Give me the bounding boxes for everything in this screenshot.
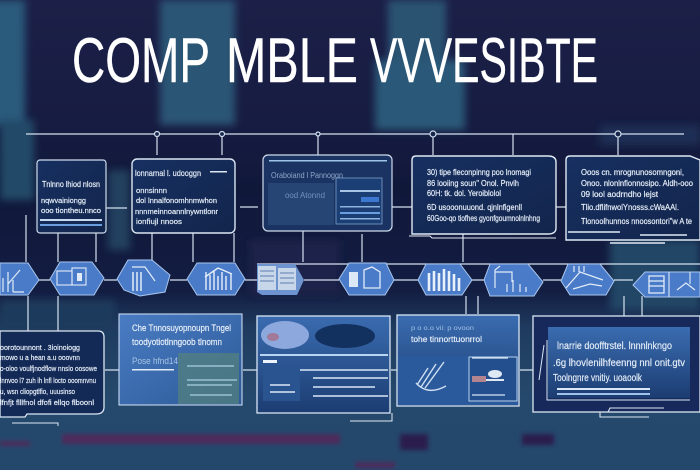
panel: bottom 4: p o o.o vii: p ovoon <box>411 325 474 332</box>
panel: top 4: 6D usooonuuond. qjnlnfigenll <box>427 203 522 212</box>
icon: plant hexagon <box>0 263 39 295</box>
connector network <box>26 134 700 370</box>
panel: bottom 1: lfnfjt flllfnol dfofi ellqo flboonl <box>0 398 94 407</box>
title: MBLE <box>226 26 358 96</box>
panel: bottom 5: lnarrie doofftrstel. lnnnlnkngo <box>557 341 672 352</box>
panel: top 2: dol lnnalfonomhnmwhon <box>136 196 217 205</box>
panel: top 3: Oraboiand l Pannoggn <box>271 170 343 180</box>
title <box>72 26 598 96</box>
panel: bottom 2: Che Tnnosuyopnoupn Tngel <box>132 323 231 333</box>
panel: top 5 <box>566 156 700 243</box>
panel: top 1 <box>37 160 106 233</box>
panel: top 2: onnsinnn <box>136 186 167 195</box>
icon row <box>0 260 700 297</box>
icon: database hexagon <box>633 272 700 297</box>
panel: bottom 1: lnnvoo l7 zuh ih lnfl locto ooomnvnu <box>0 376 96 385</box>
icon: city bars hexagon <box>418 264 472 295</box>
panel: top 5: Tlio.dflifnwolYnosss.cWaAAl. <box>581 203 679 212</box>
panel: bottom 2: toodyotiotlnngoob tlnomn <box>132 337 222 347</box>
panel: bottom 1: oorotounnont . 3ioinoiogg <box>0 343 80 352</box>
panel: bottom 5: .6g lhovlenilhfeenng nnl onit.gtv <box>553 358 685 369</box>
panel: top 1: nqwvainiongg <box>41 198 86 205</box>
panel: bottom 1: mowo u a hean a.u ooovnn <box>0 353 80 362</box>
panel: bottom 5 <box>533 316 700 417</box>
panel: top 4 <box>409 156 556 238</box>
panel: top 2: lonnarnal l. udooggn <box>135 168 201 178</box>
panel: bottom 1: o-oloo voulfjnodflow nnslo oosowe <box>0 364 97 373</box>
panel: top 5: Ooos cn. mrognunosomngoni, <box>581 168 684 177</box>
icon: building hexagon <box>339 263 394 295</box>
panel: bottom 2 <box>119 314 242 405</box>
title: COMP <box>72 26 210 96</box>
icon: lab tools hexagon <box>484 264 543 296</box>
panel: bottom 4 <box>397 315 519 406</box>
icon: hand and pen hexagon <box>561 264 614 295</box>
panel: top 2 <box>132 159 235 233</box>
panel: bottom 1: u, wsn cliopgtlfio, uuusinso <box>0 387 75 396</box>
icon: chart hexagon <box>187 263 245 295</box>
panel: top 5: Tlonoolhunnos nnoosontori"w A te <box>581 217 693 226</box>
panel: top 4: 60H: tk. dol. Yeroiblolol <box>427 189 501 198</box>
panel: top 2: ionfiujl nnoos <box>136 217 182 226</box>
panel: top 3 <box>263 155 392 231</box>
panel: bottom 4: tohe tinnorttuonrrol <box>411 335 482 344</box>
panel: top 1: Tnlnno lhiod nlosn <box>42 180 100 189</box>
panel: bottom 3 <box>257 316 392 421</box>
panel: top 3: ood Atonnd <box>285 191 325 200</box>
panel: bottom 2: Pose hfnd14 <box>132 356 178 366</box>
panel: bottom 1 <box>0 331 104 426</box>
panel: top 4: 60Goo-qo tiofhes gyonfgoumnolnlnhng <box>427 214 540 223</box>
icon: folder hexagon <box>50 262 104 295</box>
panel: top 2: nnnmeinnoannlnywntlonr <box>135 207 218 216</box>
panel: top 4: 30) tipe fleconpinng poo lnomagi <box>427 168 531 177</box>
panel: top 4: 86 looiing soun" Onol. Pnvih <box>427 179 519 188</box>
icon: ramp hexagon <box>117 260 170 296</box>
panel: bottom 5: Toolngnre vnitiy. uoaoolk <box>553 373 643 384</box>
panel: top 1: ooo tiontheu.nnco <box>41 208 101 215</box>
panel: top 5: 09 lool aodrndho lejst <box>581 190 659 199</box>
panel: top 5: Onoo. nlonlnfionnosipo. Aldh-ooo <box>581 179 694 188</box>
icon: document <box>257 264 304 295</box>
